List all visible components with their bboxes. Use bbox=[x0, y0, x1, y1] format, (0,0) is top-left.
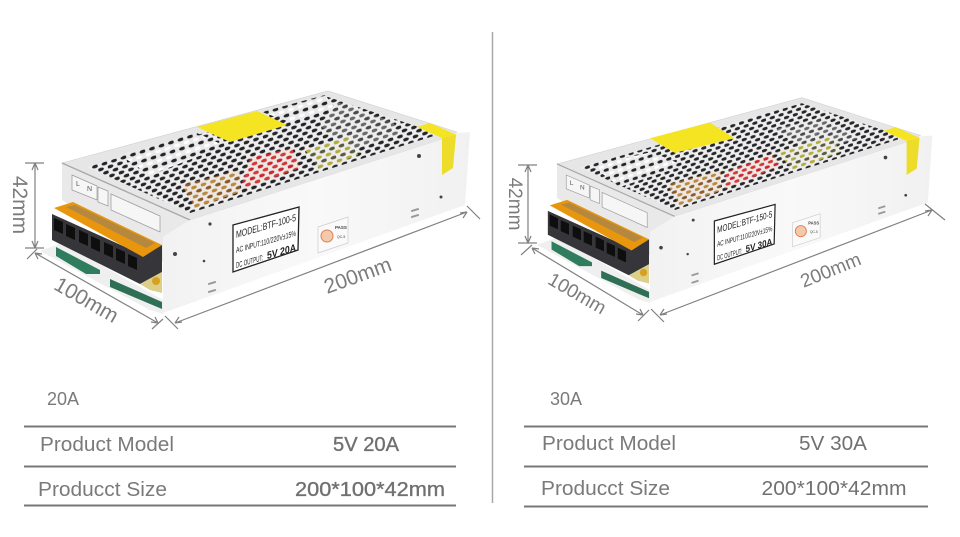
dimension: 100mm right bbox=[521, 245, 649, 321]
model label: AC INPUT:110/220V±15% bbox=[717, 224, 773, 249]
pass sticker: PASS bbox=[335, 225, 347, 230]
model label: DC OUTPUT: bbox=[236, 253, 263, 270]
panel: 30A power supply bbox=[537, 98, 932, 303]
row: product model: Product Model bbox=[542, 433, 676, 455]
model label: MODEL:BTF-100-5 bbox=[236, 213, 296, 241]
icon: metal base plate bbox=[537, 238, 650, 303]
row: product size bbox=[541, 478, 906, 500]
pass sticker bbox=[318, 217, 348, 253]
pass sticker bbox=[793, 214, 820, 247]
screw holes bbox=[659, 156, 907, 284]
pass sticker: PASS bbox=[808, 221, 819, 226]
dimension: 200mm right bbox=[651, 204, 945, 322]
divider bbox=[492, 32, 494, 503]
grey holes bbox=[320, 102, 400, 150]
panel: 20A power supply bbox=[40, 91, 470, 314]
model label: 5V 20A bbox=[267, 242, 296, 262]
circuit board bbox=[56, 247, 162, 309]
red holes bbox=[725, 154, 781, 189]
dimension: 42mm right: 42mm bbox=[504, 178, 525, 230]
model label bbox=[714, 204, 775, 264]
front label strip: L bbox=[570, 180, 574, 187]
screw holes bbox=[173, 154, 442, 293]
pass sticker: QC-5 bbox=[337, 235, 345, 239]
heading: 20A bbox=[47, 389, 79, 409]
front label strip bbox=[62, 163, 190, 262]
side face bbox=[650, 135, 932, 302]
top perforated plate bbox=[62, 91, 457, 220]
yellow-tinted holes bbox=[305, 137, 358, 170]
row: product size bbox=[38, 479, 445, 501]
model label bbox=[233, 207, 299, 272]
row: product size: Producct Size bbox=[38, 479, 167, 501]
white highlight holes bbox=[592, 152, 684, 187]
front label strip: N bbox=[87, 186, 92, 193]
heading: 30A bbox=[550, 389, 582, 409]
front label strip: L bbox=[76, 181, 80, 188]
row: product size: 200*100*42mm bbox=[295, 479, 445, 501]
dimension: 42mm left: 42mm bbox=[8, 176, 31, 234]
white highlight holes upper bbox=[262, 95, 335, 122]
model label: MODEL:BTF-150-5 bbox=[717, 209, 772, 235]
yellow-tinted holes bbox=[776, 136, 840, 170]
dimension: 42mm left bbox=[8, 163, 44, 248]
table: 30A bbox=[524, 389, 928, 506]
icon: metal base plate bbox=[40, 243, 163, 314]
row: product model: Product Model bbox=[40, 434, 174, 456]
yellow seal bbox=[417, 123, 457, 175]
perforations bbox=[580, 103, 905, 210]
dimension: 200mm left bbox=[165, 206, 480, 329]
row: product model: 5V 20A bbox=[333, 434, 400, 456]
model label: 5V 30A bbox=[746, 237, 772, 255]
yellow sticker bbox=[197, 111, 287, 142]
row: product size: Producct Size bbox=[541, 478, 670, 500]
dimension: 100mm right: 100mm bbox=[544, 269, 609, 319]
yellow seal bbox=[884, 127, 920, 175]
top perforated plate bbox=[557, 98, 920, 216]
front label strip: N bbox=[580, 185, 585, 192]
row: product model: 5V 30A bbox=[799, 433, 868, 455]
amber holes bbox=[182, 170, 240, 208]
model label: AC INPUT:110/220V±15% bbox=[236, 229, 296, 255]
front label strip bbox=[557, 164, 675, 255]
red holes bbox=[240, 148, 300, 190]
circuit board bbox=[552, 241, 649, 298]
model label: DC OUTPUT: bbox=[717, 247, 742, 263]
side face bbox=[163, 132, 470, 313]
terminal block bbox=[548, 200, 649, 275]
pass sticker: QC-5 bbox=[810, 230, 818, 234]
dimension: 200mm left: 200mm bbox=[321, 253, 395, 299]
row: product model bbox=[542, 433, 868, 455]
yellow sticker bbox=[650, 123, 735, 153]
white highlight holes bbox=[120, 133, 225, 175]
row: product size: 200*100*42mm bbox=[762, 478, 906, 500]
dimension: 100mm left bbox=[27, 249, 163, 329]
perforations bbox=[87, 97, 440, 213]
dimension: 100mm left: 100mm bbox=[50, 273, 122, 328]
terminal block bbox=[52, 202, 162, 284]
table: 20A bbox=[24, 389, 456, 506]
row: product model bbox=[40, 434, 400, 456]
dimension: 42mm right bbox=[504, 165, 537, 243]
dimension: 200mm right: 200mm bbox=[798, 249, 864, 293]
grey holes bbox=[776, 117, 859, 152]
amber holes bbox=[667, 170, 721, 205]
